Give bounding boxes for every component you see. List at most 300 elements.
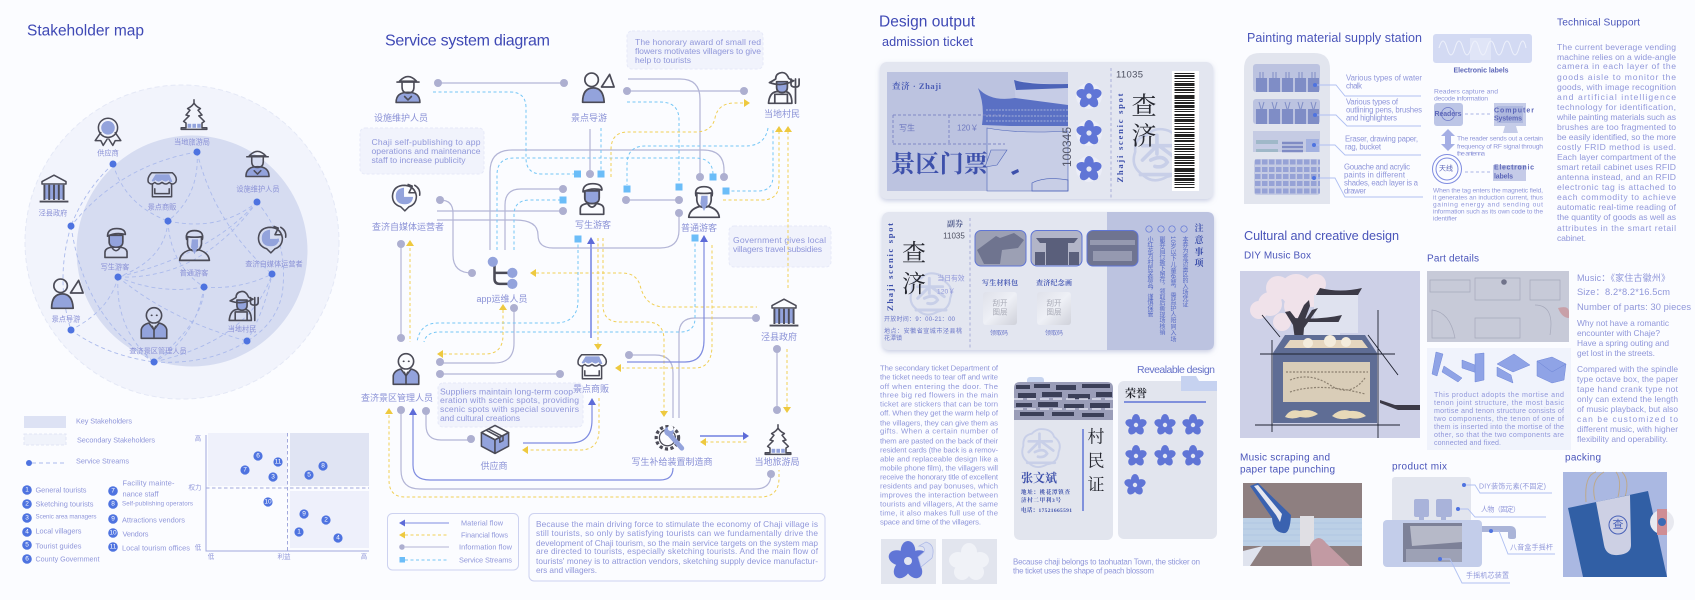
text block: technical description: automatic real-time reading of xyxy=(1557,202,1677,212)
secondary ticket: 领取码 xyxy=(990,329,1008,337)
honor card: 荣誉 xyxy=(1125,386,1147,400)
text block: technical description: while painting materials such as xyxy=(1556,112,1676,122)
secondary ticket: 查 xyxy=(902,240,926,267)
scratch-off panels: 图层 xyxy=(1046,308,1062,316)
legend: numbered stakeholders: 10 xyxy=(109,530,117,536)
cabinet captions xyxy=(1344,74,1422,196)
chart: power interest matrix: 低 xyxy=(208,552,215,560)
text block: technical description: machine relies on a wide-angle xyxy=(1557,52,1676,62)
text block: technical description: attributes in the smart retail xyxy=(1557,223,1676,233)
text block: ticket description: ticket are stickers that can be torn xyxy=(880,400,998,408)
cabinet captions: drawer xyxy=(1344,186,1366,196)
legend: flow types: Information flow xyxy=(459,542,513,552)
text block: technical description: technology for identification, xyxy=(1557,102,1676,112)
legend: numbered stakeholders: 1 xyxy=(25,486,29,494)
admission ticket main: 济 xyxy=(1131,122,1157,150)
financial flow arrowheads xyxy=(385,99,792,454)
stakeholder labels: 普通游客 xyxy=(180,268,208,278)
callout: suppliers: Suppliers maintain long-term coop xyxy=(440,386,573,396)
admission ticket main: 查 xyxy=(1131,92,1157,120)
text block: ticket description: gifts. When a certain number of xyxy=(880,426,999,436)
chart: power interest matrix: 3 xyxy=(271,474,275,480)
notice text: 小红花为村民奖励品，谨慎保管 xyxy=(1146,235,1153,318)
actor labels: 写生游客 xyxy=(575,219,611,230)
cabinet captions: Various types of xyxy=(1346,98,1399,106)
icon: medal supplier xyxy=(95,118,121,145)
service stream lines xyxy=(417,92,773,342)
chart: power interest matrix xyxy=(188,433,369,560)
photos: three scenic views xyxy=(975,230,1138,266)
text block: ticket description: three big red flowers in the main xyxy=(880,390,998,400)
actor labels: 普通游客 xyxy=(681,222,717,233)
notice text: 意 xyxy=(1194,234,1204,245)
actor labels: 写生补给装置制造商 xyxy=(631,456,713,467)
icon: sketching tourist xyxy=(105,229,127,257)
actor labels: 当地旅游局 xyxy=(754,456,800,467)
secondary ticket: 济 xyxy=(902,271,926,298)
villager card: 电话：17521665591 xyxy=(1021,506,1072,514)
legend: numbered stakeholders: Tourist guides xyxy=(36,542,82,550)
chart: power interest matrix: 高 xyxy=(195,434,202,442)
notice text: 事 xyxy=(1194,246,1204,257)
secondary ticket: 查济纪念画 xyxy=(1036,278,1072,287)
notice text: 注 xyxy=(1194,222,1204,233)
diagram: RFID: frequency of RF signal through xyxy=(1457,144,1543,150)
material flow arrowheads xyxy=(409,235,749,440)
stakeholder labels: 写生游客 xyxy=(101,262,129,272)
stakeholder labels: 查济景区管理人员 xyxy=(129,346,187,356)
text block: ticket description: residents and pay bonuses, which xyxy=(880,482,998,490)
diagram: RFID: When the tag enters the magnetic field, xyxy=(1433,188,1543,194)
chart: power interest matrix: 1 xyxy=(297,528,301,536)
diagram: RFID: labels xyxy=(1494,174,1513,180)
stakeholder labels: 当地旅游局 xyxy=(174,138,210,146)
legend: numbered stakeholders: 8 xyxy=(111,500,115,508)
caption: peach blossom: the ticket uses the shape of peach blossom xyxy=(1013,566,1154,576)
diagram: product mix: DIY装饰元素(不固定) xyxy=(1479,482,1546,490)
callout: suppliers: eration with scenic spots, providing xyxy=(440,395,579,405)
callout: honorary award: flowers motivates villagers to give xyxy=(635,46,761,56)
icon: manufacturer gear xyxy=(656,425,682,449)
information flow lines xyxy=(401,79,777,489)
callout: honorary award xyxy=(627,31,763,69)
actor labels: 查济景区管理人员 xyxy=(361,392,433,403)
legend: flow types: Financial flows xyxy=(461,530,508,540)
heading: stakeholder map: Stakeholder map xyxy=(27,22,144,40)
chart: power interest matrix: 9 xyxy=(302,510,306,518)
icon: area manager xyxy=(393,354,419,384)
stakeholder labels: 当地村民 xyxy=(228,324,256,334)
legend: numbered stakeholders: Sketching tourists xyxy=(36,500,94,508)
heading: music scraping: paper tape punching xyxy=(1240,464,1335,476)
panel: mortise and tenon: This product adopts the mortise and xyxy=(1434,391,1564,399)
text block: ticket description: The secondary ticket Department of xyxy=(880,364,999,372)
text block: music box specifications: Compared with the spindle xyxy=(1577,364,1678,374)
stakeholder labels: 景点导游 xyxy=(52,314,80,324)
panel: design output xyxy=(879,14,1217,584)
heading: product mix: product mix xyxy=(1392,462,1447,472)
legend: numbered stakeholders: 6 xyxy=(25,556,29,562)
legend: numbered stakeholders: Scenic area managers xyxy=(36,514,96,520)
actor labels: 景点导游 xyxy=(571,112,607,123)
text block: ticket description: them are pasted on the back of their xyxy=(880,436,998,446)
diagram: RFID: Readers capture and xyxy=(1434,88,1498,96)
legend: numbered stakeholders: 2 xyxy=(25,500,29,508)
secondary ticket: 120￥ xyxy=(937,288,955,296)
text block: ticket description: able and replaceable design like a xyxy=(880,454,999,464)
outer circle: secondary stakeholders xyxy=(25,85,339,399)
legend: map key: Service Streams xyxy=(76,456,129,466)
villager card: 民 xyxy=(1088,452,1104,470)
icon: general tourist xyxy=(689,187,719,217)
notice text: 副券自行撕下留存，领取后撕现场核销 xyxy=(1158,235,1165,336)
text block: music box specifications: only can extend the length xyxy=(1577,394,1678,404)
legend: numbered stakeholders: 9 xyxy=(111,516,115,522)
diagram: RFID: 天线 xyxy=(1439,164,1453,172)
icon: sketching tourist xyxy=(580,184,604,214)
notice text: 项 xyxy=(1194,257,1204,268)
legend: numbered stakeholders: 5 xyxy=(25,542,29,548)
icon: county government xyxy=(40,175,68,202)
caption: peach blossom xyxy=(1013,558,1200,576)
villager card: 村 xyxy=(1088,428,1104,446)
secondary ticket: Zhaji scenic spot xyxy=(885,223,895,311)
heading: DIY music box: DIY Music Box xyxy=(1244,250,1311,262)
chart: power interest matrix: 权力 xyxy=(188,482,202,492)
stakeholder labels: 景点商贩 xyxy=(148,202,176,212)
callout: self-publishing xyxy=(360,128,484,174)
information flow nodes xyxy=(397,79,781,478)
secondary ticket: 当日有效 xyxy=(937,274,965,282)
callout: government subsidies: Government gives local xyxy=(733,235,826,245)
icon: guide xyxy=(583,73,614,102)
panel: technical support xyxy=(1556,18,1677,243)
villager card: 地址：桃花潭镇查 xyxy=(1021,488,1070,496)
icon: supplier box xyxy=(481,425,509,453)
text block: ticket description: the villagers, they can give them as xyxy=(880,418,998,428)
diagram: RFID: Electronic labels xyxy=(1454,68,1509,74)
diagram: RFID xyxy=(1432,34,1544,222)
callout: government subsidies: villagers travel subsidies xyxy=(733,244,822,254)
panel: mortise and tenon: connected and fixed. xyxy=(1434,439,1501,447)
diagram: RFID: it generates an induction current, thus xyxy=(1433,194,1544,202)
callout: suppliers: and cultural creations xyxy=(440,413,520,423)
text box: service explanation: tourists' money is to attraction vendors, sketching supply device manufactur- xyxy=(536,556,818,566)
text block: ticket description: off when entering the door. The xyxy=(880,382,998,391)
text block: ticket description xyxy=(880,364,999,526)
stakeholder labels: 泾县政府 xyxy=(39,208,67,218)
illustration: music box xyxy=(1240,271,1420,438)
text block: music box specifications: flexibility and operability. xyxy=(1577,434,1668,444)
text block: technical description xyxy=(1556,42,1677,243)
icon: area manager xyxy=(141,308,167,338)
legend: numbered stakeholders: Local tourism offices xyxy=(122,544,190,552)
cabinet captions: chalk xyxy=(1346,82,1362,90)
admission ticket main: 查济 · Zhaji xyxy=(892,81,942,91)
text block: technical description: brushes are too fragmented to xyxy=(1557,122,1676,132)
cabinet illustration xyxy=(1244,53,1330,204)
diagram: RFID: information such as its own code to the xyxy=(1433,208,1543,216)
scratch-off panels xyxy=(983,292,1071,325)
panel: mortise and tenon: them is inserted into the mortise of the xyxy=(1434,423,1564,431)
scratch-off panels: 刮开 xyxy=(1046,298,1062,308)
notice text: 本券为查济景区的入场凭证 xyxy=(1181,235,1188,308)
notice text xyxy=(1146,222,1204,343)
callout: self-publishing: Chaji self-publishing to app xyxy=(372,137,481,147)
text block: ticket description: space and time of the villagers. xyxy=(880,518,981,526)
caption: peach blossom: Because chaji belongs to taohuatan Town, the sticker on xyxy=(1013,558,1200,566)
chart: power interest matrix: 利益 xyxy=(278,552,291,560)
icon: vendor store xyxy=(148,173,176,197)
honor card xyxy=(1118,376,1217,539)
callout: honorary award: help to tourists xyxy=(635,55,691,65)
panel: painting material supply station xyxy=(1244,31,1544,222)
text block: technical description: antenna instead, and an RFID xyxy=(1557,172,1676,182)
chart: power interest matrix: 10 xyxy=(264,498,272,506)
admission ticket main xyxy=(880,62,1213,199)
legend: numbered stakeholders: Vendors xyxy=(122,530,149,538)
text block: music box specifications: get lost in the streets. xyxy=(1577,348,1655,358)
actor labels: 供应商 xyxy=(480,460,508,471)
photo: village rooftops xyxy=(1014,382,1113,420)
chart: power interest matrix: 2 xyxy=(324,516,328,524)
legend: map key: Secondary Stakeholders xyxy=(77,436,155,444)
admission ticket main: 11035 xyxy=(1116,70,1143,80)
admission ticket main: 120￥ xyxy=(957,124,978,132)
diagram: RFID: The reader sends out a certain xyxy=(1457,136,1543,142)
text block: music box specifications: Number of parts: 30 pieces xyxy=(1577,302,1691,312)
panel: mortise and tenon: tenon joint structure, the most basic xyxy=(1434,399,1564,407)
financial flow lines xyxy=(389,103,788,497)
text block: technical description: goods, with image recognition xyxy=(1557,82,1676,92)
legend: numbered stakeholders: Facility mainte- xyxy=(122,478,175,488)
pointer lines xyxy=(1314,85,1423,197)
cabinet captions: Eraser, drawing paper, xyxy=(1345,134,1418,144)
admission ticket main: 写生 xyxy=(899,122,915,132)
diagram: product mix xyxy=(1383,477,1555,583)
secondary ticket: 11035 xyxy=(943,232,965,240)
secondary ticket: 花潭镇 xyxy=(884,334,902,342)
actor labels: 当地村民 xyxy=(764,108,800,119)
service stream squares xyxy=(560,170,730,242)
legend: numbered stakeholders: County Government xyxy=(36,554,100,564)
actor labels: 查济自媒体运营者 xyxy=(372,221,444,232)
actor labels: 景点商贩 xyxy=(573,383,609,394)
text block: technical description: electronic tag is attached to xyxy=(1557,182,1676,192)
diagram: product mix: 手摇机芯装置 xyxy=(1466,570,1509,580)
legend: flow types: Service Streams xyxy=(459,556,512,564)
panel: mortise and tenon xyxy=(1427,348,1571,450)
legend: numbered stakeholders: nance staff xyxy=(122,490,159,498)
photo: packaging bag: 查 xyxy=(1612,517,1624,531)
admission ticket main: 100345 xyxy=(1060,127,1074,167)
chart: power interest matrix: 高 xyxy=(361,552,368,560)
secondary ticket: 地点：安徽省宣城市泾县桃 xyxy=(884,327,962,335)
stakeholder nodes xyxy=(68,148,276,366)
text box: service explanation: still tourists, so only by satisfying tourists can we fundamentally drive the xyxy=(536,528,818,538)
icon: app operations xyxy=(488,257,517,289)
panel: service system diagram xyxy=(360,31,831,581)
actor labels xyxy=(361,108,800,471)
legend: numbered stakeholders: Attractions vendors xyxy=(122,516,185,524)
diagram: RFID: identifier xyxy=(1433,216,1458,222)
cabinet captions: Various types of water xyxy=(1346,74,1422,82)
icon: pagoda tourism office xyxy=(181,100,207,129)
text box: service explanation: Because the main driving force to stimulate the economy of Chaji village is xyxy=(536,519,818,529)
text box: service explanation xyxy=(529,514,825,581)
icon: county government xyxy=(770,299,798,326)
chart: power interest matrix: 11 xyxy=(275,458,282,466)
text block: technical description: costly FRID method is used. xyxy=(1557,142,1676,152)
text block: ticket description: resident cards (the back is a remov- xyxy=(880,446,998,454)
service stream links xyxy=(63,152,284,362)
secondary ticket: 写生材料包 xyxy=(982,278,1018,287)
text block: technical description: cabinet. xyxy=(1557,233,1586,243)
icon: scenic guide xyxy=(52,279,83,308)
text block: ticket description: improves the interaction between xyxy=(880,490,998,500)
legend: numbered stakeholders: General tourists xyxy=(36,486,87,494)
text block: technical description: be easily identified, so the more xyxy=(1557,132,1676,142)
text block: technical description: and artificial intelligence xyxy=(1557,92,1676,102)
callout: honorary award: The honorary award of small red xyxy=(635,37,761,47)
inner circle: key stakeholders xyxy=(76,136,308,366)
text block: music box specifications xyxy=(1577,272,1691,444)
text block: music box specifications: Music：《家住古徽州》 xyxy=(1577,272,1670,283)
legend: numbered stakeholders: 7 xyxy=(111,488,115,494)
panel: stakeholder map xyxy=(22,22,369,564)
stickers: three flowers xyxy=(1075,83,1103,182)
chart: power interest matrix: 5 xyxy=(307,472,311,478)
text block: ticket description: receive the honorary title of excellent xyxy=(880,472,999,482)
diagram: RFID: Computer xyxy=(1494,108,1534,114)
heading: revealable design: Revealable design xyxy=(1137,364,1215,376)
legend: numbered stakeholders: Local villagers xyxy=(36,526,82,536)
text block: technical description: goods aisle to monitor the xyxy=(1557,72,1676,82)
icon: maintenance worker xyxy=(396,77,420,102)
secondary ticket: 副券 xyxy=(947,218,963,228)
heading: service system diagram: Service system diagram xyxy=(385,32,550,50)
callout: self-publishing: staff to increase publicity xyxy=(372,155,466,165)
callout: government subsidies xyxy=(729,226,831,267)
text block: ticket description: off. When they get the warm help of xyxy=(880,408,999,418)
heading: admission ticket: admission ticket xyxy=(882,35,973,49)
text block: ticket description: mobile phone film), the villagers will xyxy=(880,464,998,472)
text block: ticket description: the ticket needs to tear off and write xyxy=(880,372,998,382)
text block: music box specifications: of music playback, but also xyxy=(1577,404,1678,414)
diagram: RFID: Electronic xyxy=(1494,164,1534,172)
panel: mortise and tenon: other, so that the two components are xyxy=(1434,431,1564,439)
callout: suppliers xyxy=(438,383,583,427)
icon: media operator xyxy=(392,184,420,211)
heading: packing: packing xyxy=(1565,452,1601,464)
secondary ticket: 开放时间：9：00-21：00 xyxy=(884,315,956,323)
text block: music box specifications: different music, with higher xyxy=(1577,424,1678,434)
text block: music box specifications: type octave box, the paper xyxy=(1577,374,1678,384)
panel: mortise and tenon: mortise and tenon structure consists of xyxy=(1434,407,1564,415)
heading: cultural and creative design: Cultural and creative design xyxy=(1244,229,1399,243)
text block: technical description: smart retail cabinet uses RFID xyxy=(1557,162,1676,172)
panel: mortise and tenon: two components, the tenon of one of xyxy=(1434,415,1564,423)
chart: power interest matrix: 8 xyxy=(321,462,325,470)
cabinet captions: rag, bucket xyxy=(1345,142,1382,152)
callout: self-publishing: operations and maintenance xyxy=(372,146,481,156)
legend: map key xyxy=(24,416,155,466)
diagram: product mix: 八音盒手摇杆 xyxy=(1510,542,1553,552)
icon: maintenance worker xyxy=(246,151,269,177)
notice text: 10岁以下儿童免票，需监护人陪同入场 xyxy=(1169,236,1176,343)
admission ticket main: 景区门票 xyxy=(891,151,988,178)
legend: flow types: Material flow xyxy=(461,518,504,528)
text block: music box specifications: Why not have a romantic xyxy=(1577,318,1669,328)
photo: paper tape punching xyxy=(1243,483,1362,566)
actor labels: app运维人员 xyxy=(476,293,528,304)
actor labels: 设施维护人员 xyxy=(374,112,428,123)
diagram: RFID: Readers xyxy=(1434,111,1462,118)
cabinet captions: paints in different xyxy=(1344,170,1406,180)
icon: vendor xyxy=(578,355,606,379)
scratch-off panels: 图层 xyxy=(992,308,1008,316)
heading: supply station: Painting material supply station xyxy=(1247,31,1422,45)
villager card: 张文斌 xyxy=(1021,470,1058,485)
heading: music scraping: Music scraping and xyxy=(1240,452,1330,464)
stakeholder labels: 查济自媒体运营者 xyxy=(245,260,303,268)
text block: music box specifications: encounter with Chaje? xyxy=(1577,328,1660,338)
text block: ticket description: tourists and villagers, At the same xyxy=(880,500,998,508)
cabinet captions: outlining pens, brushes xyxy=(1346,106,1422,114)
villager card: 证 xyxy=(1088,476,1104,494)
text box: service explanation: are directed to tourists, especially sketching tourists. And the main flow of xyxy=(536,546,819,556)
legend: numbered stakeholders xyxy=(22,478,193,564)
cabinet captions: Gouache and acrylic xyxy=(1344,162,1410,172)
villager card xyxy=(1014,377,1113,540)
chart: power interest matrix: 低 xyxy=(195,542,202,552)
text box: service explanation: development of Chaji tourism, so the main service targets on the system map xyxy=(536,538,818,548)
sticker demo: peeling flower xyxy=(881,539,936,584)
scratch-off panels: 刮开 xyxy=(992,298,1008,308)
photo: laser-cut parts xyxy=(1427,271,1569,342)
icon: media operator xyxy=(258,226,286,253)
panel: cultural and creative design xyxy=(1240,229,1691,583)
barcode xyxy=(1172,71,1199,191)
chart: power interest matrix: 7 xyxy=(243,466,247,474)
text block: technical description: the quantity of goods as well as xyxy=(1557,212,1676,222)
legend: flow types xyxy=(388,514,518,570)
text block: music box specifications: can be customized to xyxy=(1577,414,1678,424)
icon: villager xyxy=(768,73,799,103)
icon: tourism bureau xyxy=(765,425,791,454)
text block: ticket description: time, it also makes full use of the xyxy=(880,508,998,518)
chart: power interest matrix: 6 xyxy=(256,452,260,460)
heading: technical support: Technical Support xyxy=(1557,18,1640,28)
text box: service explanation: ers and villagers. xyxy=(536,565,597,575)
pointer dots xyxy=(1312,83,1317,180)
text block: technical description: camera in each layer of the xyxy=(1557,61,1676,71)
icon: general tourist xyxy=(180,231,209,260)
cabinet captions: and highlighters xyxy=(1346,114,1397,122)
legend: map key: Key Stakeholders xyxy=(76,416,132,426)
chart: power interest matrix: 4 xyxy=(336,534,340,542)
heading: part details: Part details xyxy=(1427,254,1479,264)
diagram: RFID: gaining energy and sending out xyxy=(1433,202,1543,208)
villager card: 济村二甲利3号 xyxy=(1021,496,1061,504)
sticker demo: blank flower xyxy=(942,539,997,584)
illustration: roofs xyxy=(978,80,1068,191)
actor labels: 泾县政府 xyxy=(761,331,797,342)
stakeholder labels: 设施维护人员 xyxy=(236,184,280,194)
heading: music scraping xyxy=(1240,452,1335,476)
text block: music box specifications: Have a spring outing and xyxy=(1577,338,1669,348)
text block: music box specifications: Size：8.2*8.2*16.5cm xyxy=(1577,287,1670,297)
